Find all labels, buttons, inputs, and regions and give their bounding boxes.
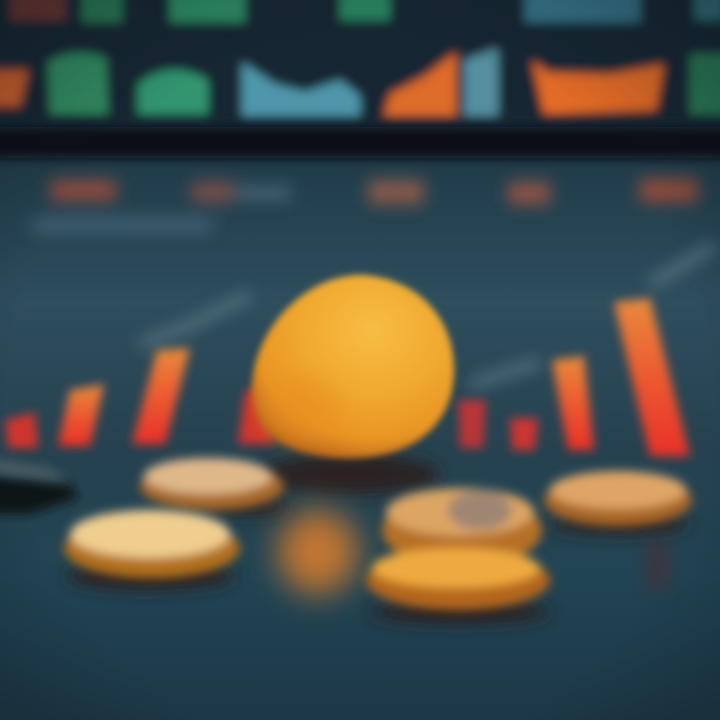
icon: gold egg — [252, 275, 454, 458]
coin stack: center right — [366, 488, 550, 610]
coin: right — [544, 471, 692, 526]
egg shading blotch — [258, 376, 342, 444]
faint red reflection — [645, 540, 671, 590]
coin: front left — [64, 510, 240, 578]
panel: top market board — [0, 0, 720, 125]
bar chart: right red bars — [458, 298, 690, 456]
coin: back left — [140, 458, 284, 510]
coin shadows — [65, 454, 690, 624]
blurred labels row — [32, 178, 698, 232]
black divider band — [0, 127, 720, 158]
left dark shelf — [0, 474, 78, 514]
coin reflection — [278, 510, 358, 594]
chart trend lines — [140, 245, 715, 385]
bar chart: left red bars — [5, 348, 275, 448]
